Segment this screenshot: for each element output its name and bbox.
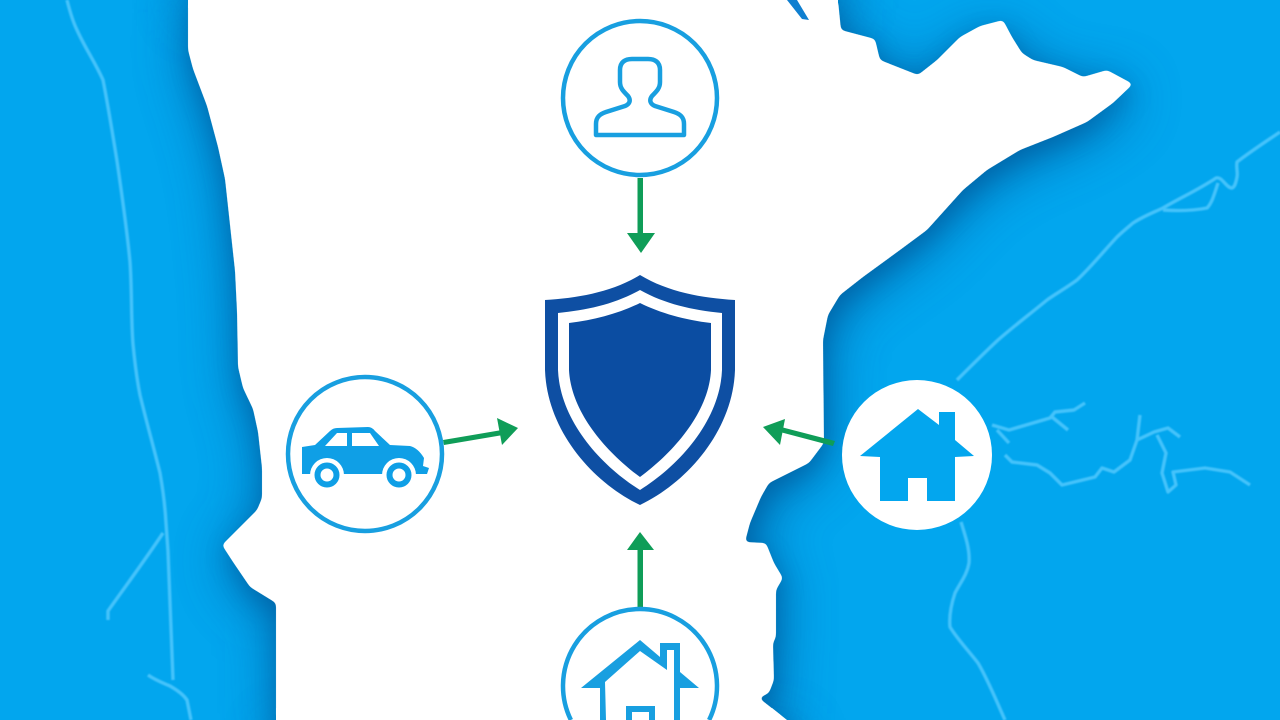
river: west branch xyxy=(108,533,163,620)
river: east upper xyxy=(992,403,1085,443)
river: east lower xyxy=(1005,415,1250,492)
icon: outline house circle xyxy=(563,609,717,720)
notch line at top xyxy=(787,0,809,20)
arrow: bottom house to shield xyxy=(627,532,654,607)
Minnesota map silhouette xyxy=(188,0,1133,720)
icon: solid house circle xyxy=(842,380,992,530)
river: loop xyxy=(1163,183,1218,211)
river: west border xyxy=(67,0,173,680)
river: south-east xyxy=(950,522,1005,720)
icon: car circle xyxy=(288,377,442,531)
arrow: solid house to shield xyxy=(763,419,835,446)
river: north-east xyxy=(957,132,1280,380)
river: south-west branch xyxy=(148,675,191,720)
arrow: person to shield xyxy=(627,178,655,253)
arrow: car to shield xyxy=(443,418,518,445)
map shadow xyxy=(188,0,1133,720)
icon: person circle xyxy=(563,21,717,175)
icon: shield xyxy=(545,275,735,505)
